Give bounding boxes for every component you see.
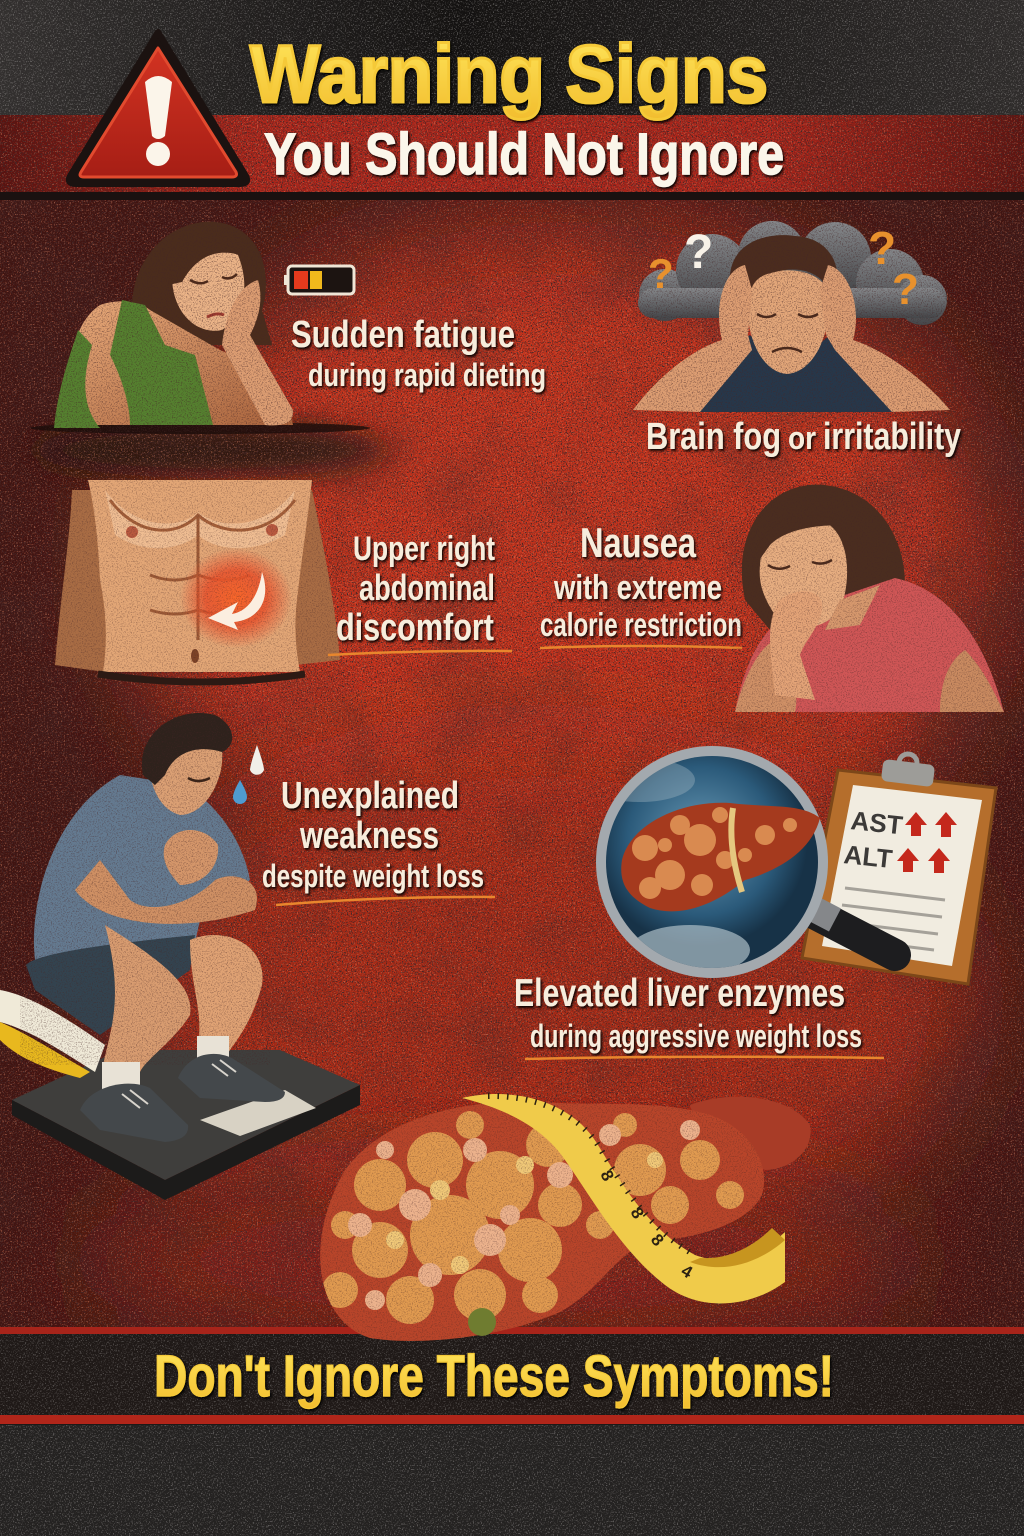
title	[250, 29, 784, 187]
text: sudden fatigue: Sudden fatigue	[291, 314, 515, 356]
text: footer call to action: Don't Ignore These Symptoms!	[154, 1344, 834, 1409]
text: brain fog: or	[788, 420, 816, 456]
arrow: pain pointer	[208, 572, 265, 630]
text: unexplained weakness: Unexplained	[281, 775, 459, 817]
text: unexplained weakness	[262, 775, 484, 894]
header band	[0, 115, 1024, 200]
illustration: clipboard with AST ALT	[802, 754, 996, 984]
illustration: woman with nausea	[732, 485, 1007, 715]
text: nausea	[540, 519, 742, 643]
icon: question marks: ?	[868, 222, 896, 274]
text: sudden fatigue	[291, 314, 546, 393]
title: You Should Not Ignore	[264, 122, 784, 187]
text: brain fog: irritability	[823, 416, 961, 458]
text: sudden fatigue: during rapid dieting	[308, 357, 546, 393]
illustration: big liver with measuring tape: 8	[647, 1230, 668, 1250]
illustration: clipboard with AST ALT: ALT	[842, 839, 894, 874]
text: nausea: with extreme	[553, 569, 722, 607]
icon: warning triangle	[69, 32, 247, 184]
footer band	[0, 1327, 1024, 1424]
text: abdominal discomfort: Upper right	[353, 530, 495, 568]
text: abdominal discomfort: discomfort	[336, 607, 494, 649]
text: nausea: calorie restriction	[540, 606, 742, 643]
illustration: woman with fatigue	[30, 220, 370, 434]
text: elevated liver enzymes	[514, 972, 862, 1054]
text: abdominal discomfort	[336, 530, 495, 649]
text: nausea: Nausea	[580, 519, 696, 566]
illustration: man with brain fog	[630, 221, 955, 415]
icon: question marks: ?	[648, 250, 674, 297]
icon: sweat drops	[233, 745, 264, 804]
text: brain fog: Brain fog	[646, 416, 781, 458]
illustration: magnifier over liver	[585, 746, 895, 978]
text: abdominal discomfort: abdominal	[359, 567, 495, 608]
illustration: big liver with measuring tape	[300, 1090, 820, 1350]
illustration: big liver with measuring tape: 8	[627, 1204, 648, 1222]
title: Warning Signs	[250, 29, 768, 120]
illustration: abdomen torso	[50, 480, 345, 682]
icon: question marks	[648, 222, 919, 314]
text: brain fog	[646, 416, 961, 458]
icon: question marks: ?	[892, 265, 919, 314]
text: unexplained weakness: weakness	[299, 815, 439, 857]
icon: low battery	[284, 266, 354, 294]
text: elevated liver enzymes: Elevated liver enzymes	[514, 972, 845, 1015]
illustration: crouching man on scale	[0, 713, 360, 1200]
illustration: big liver with measuring tape: 8	[596, 1167, 618, 1184]
illustration: clipboard with AST ALT: AST	[849, 805, 904, 840]
illustration: big liver with measuring tape: 4	[678, 1261, 696, 1282]
icon: question marks: ?	[684, 226, 713, 279]
text: elevated liver enzymes: during aggressive weight loss	[530, 1018, 862, 1054]
text: unexplained weakness: despite weight loss	[262, 858, 484, 894]
